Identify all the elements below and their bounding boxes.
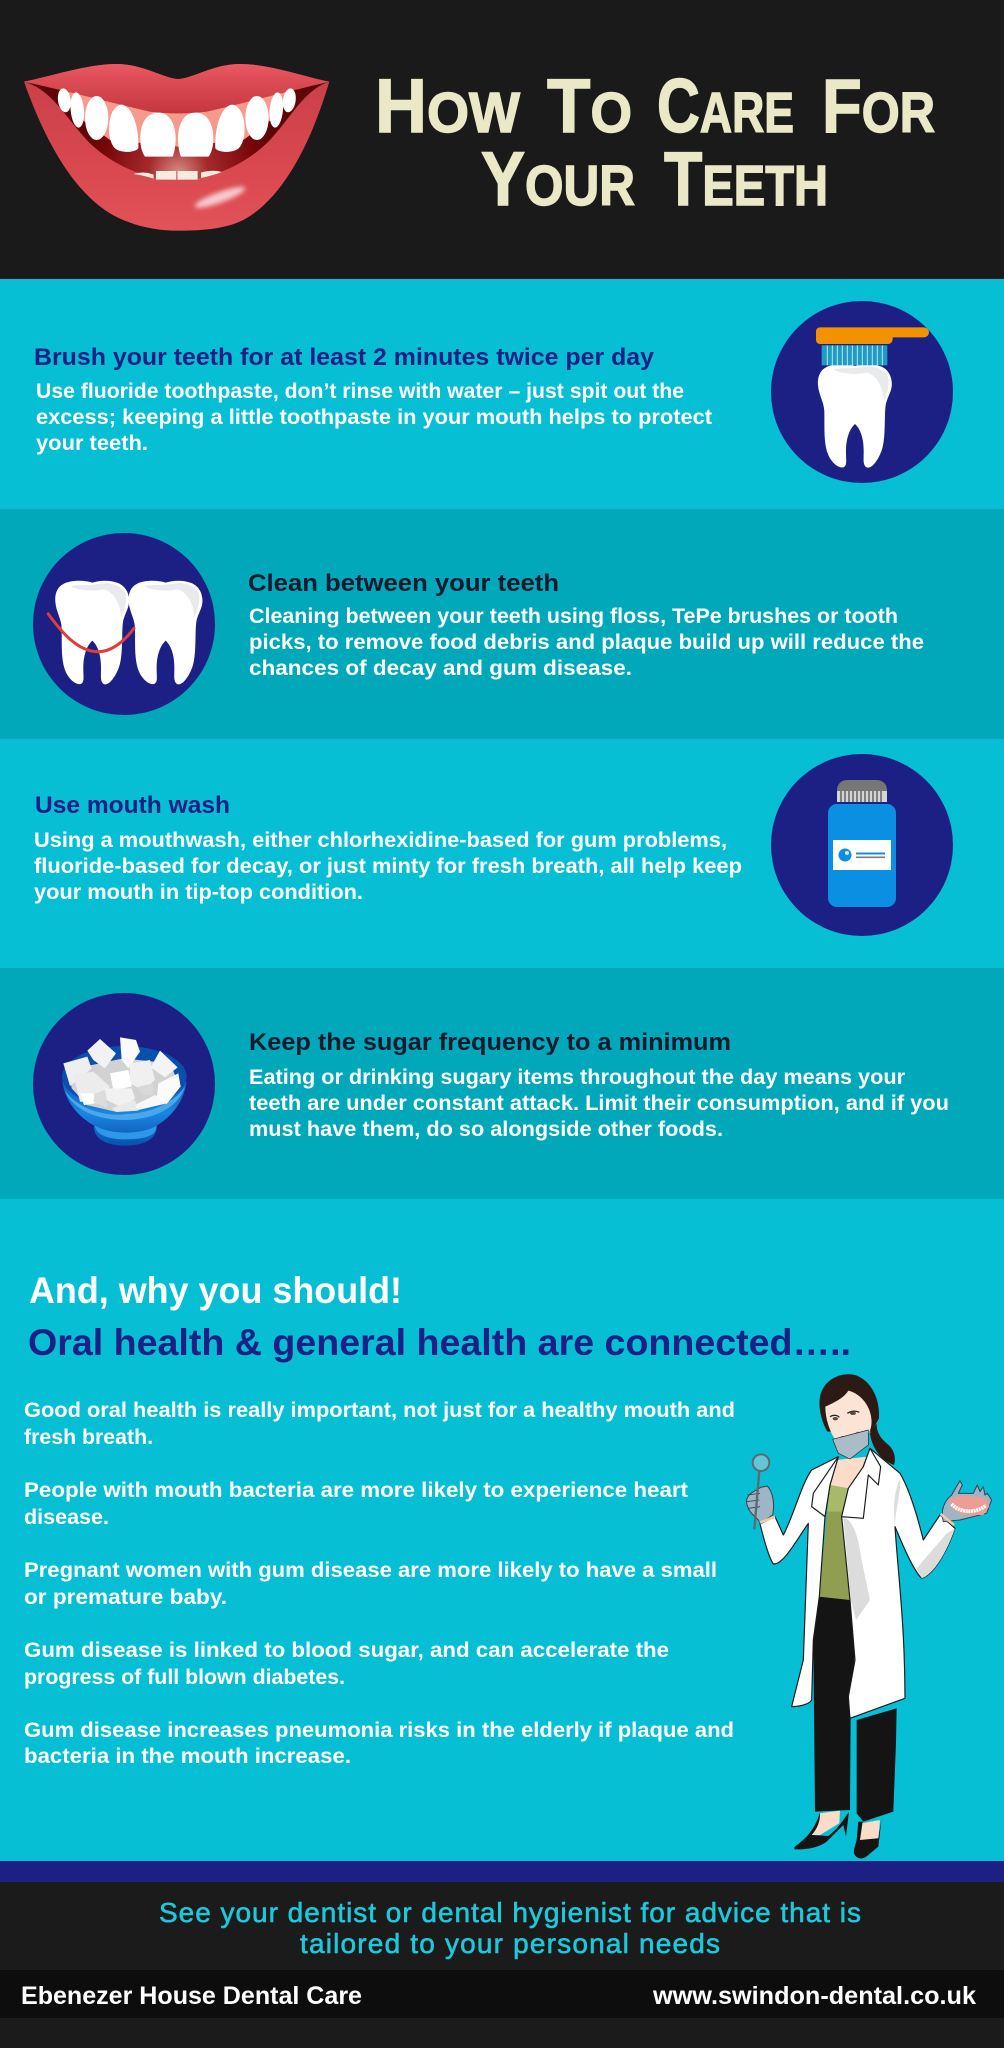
title: TO [547,64,632,149]
text: reasons: Gum disease is linked to blood sugar, and can accelerate the [24,1639,669,1662]
text: reasons: People with mouth bacteria are more likely to experience heart [24,1479,688,1502]
text: brush: Use fluoride toothpaste, don’t rinse with water – just spit out the [36,380,684,403]
text: clean: picks, to remove food debris and plaque build up will reduce the [249,631,924,654]
text: advice: tailored to your personal needs [300,1928,720,1959]
text: practice name: Ebenezer House Dental Care [21,1982,362,2010]
panel: header [0,0,1004,279]
heading: and why you should: And, why you should! [29,1270,402,1311]
text: clean [249,605,924,680]
text: clean: Cleaning between your teeth using floss, TePe brushes or tooth [249,605,898,628]
text: reasons: Pregnant women with gum disease are more likely to have a small [24,1559,717,1582]
text: clean: chances of decay and gum disease. [249,657,632,680]
text: sugar [249,1066,949,1141]
text: brush: your teeth. [36,432,148,455]
text: mouth wash: fluoride-based for decay, or just minty for fresh breath, all help keep [34,855,742,878]
panel: sugar frequency [0,968,1004,1199]
text: website: www.swindon-dental.co.uk [652,1982,976,2010]
heading: mouth wash: Use mouth wash [35,792,230,819]
title [375,64,935,222]
icon: smiling mouth [24,64,329,231]
text: advice [159,1897,861,1959]
text: sugar: must have them, do so alongside other foods. [249,1118,723,1141]
text: sugar: Eating or drinking sugary items throughout the day means your [249,1066,905,1089]
panel: brush your teeth [0,279,1004,509]
title: CARE [657,64,794,149]
title: HOW [375,64,520,149]
text: mouth wash: Using a mouthwash, either chlorhexidine-based for gum problems, [34,829,727,852]
band: navy divider [0,1861,1004,1882]
text: reasons: progress of full blown diabetes. [24,1666,345,1689]
panel: clean between teeth [0,509,1004,739]
text: mouth wash [34,829,742,904]
heading: sugar: Keep the sugar frequency to a minimum [249,1029,731,1056]
text: mouth wash: your mouth in tip-top condition. [34,881,363,904]
text: reasons [24,1399,735,1768]
heading: brush: Brush your teeth for at least 2 minutes twice per day [34,344,655,371]
panel: mouth wash [0,739,1004,968]
text: brush [36,380,712,455]
icon: bowl of sugar [33,993,215,1175]
text: advice: See your dentist or dental hygienist for advice that is [159,1897,861,1928]
title: TEETH [664,137,828,222]
heading: clean: Clean between your teeth [248,570,559,597]
panel: why you should [0,1199,1004,1861]
text: reasons: disease. [24,1506,109,1529]
panel: dentist advice [0,1882,1004,1970]
icon: toothbrush on tooth [771,301,953,483]
illustration: dentist [747,1374,992,1859]
heading: oral health connected: Oral health & general health are connected….. [28,1322,851,1363]
text: reasons: fresh breath. [24,1426,153,1449]
title: YOUR [481,137,635,222]
text: sugar: teeth are under constant attack. Limit their consumption, and if you [249,1092,949,1115]
text: reasons: or premature baby. [24,1586,227,1609]
text: reasons: Gum disease increases pneumonia risks in the elderly if plaque and [24,1719,734,1742]
icon: mouthwash bottle [771,754,953,936]
text: reasons: bacteria in the mouth increase. [24,1745,351,1768]
panel: footer [0,1970,1004,2048]
title: FOR [822,64,935,149]
text: reasons: Good oral health is really important, not just for a healthy mouth and [24,1399,735,1422]
text: brush: excess; keeping a little toothpaste in your mouth helps to protect [36,406,712,429]
icon: teeth with floss [33,533,215,715]
